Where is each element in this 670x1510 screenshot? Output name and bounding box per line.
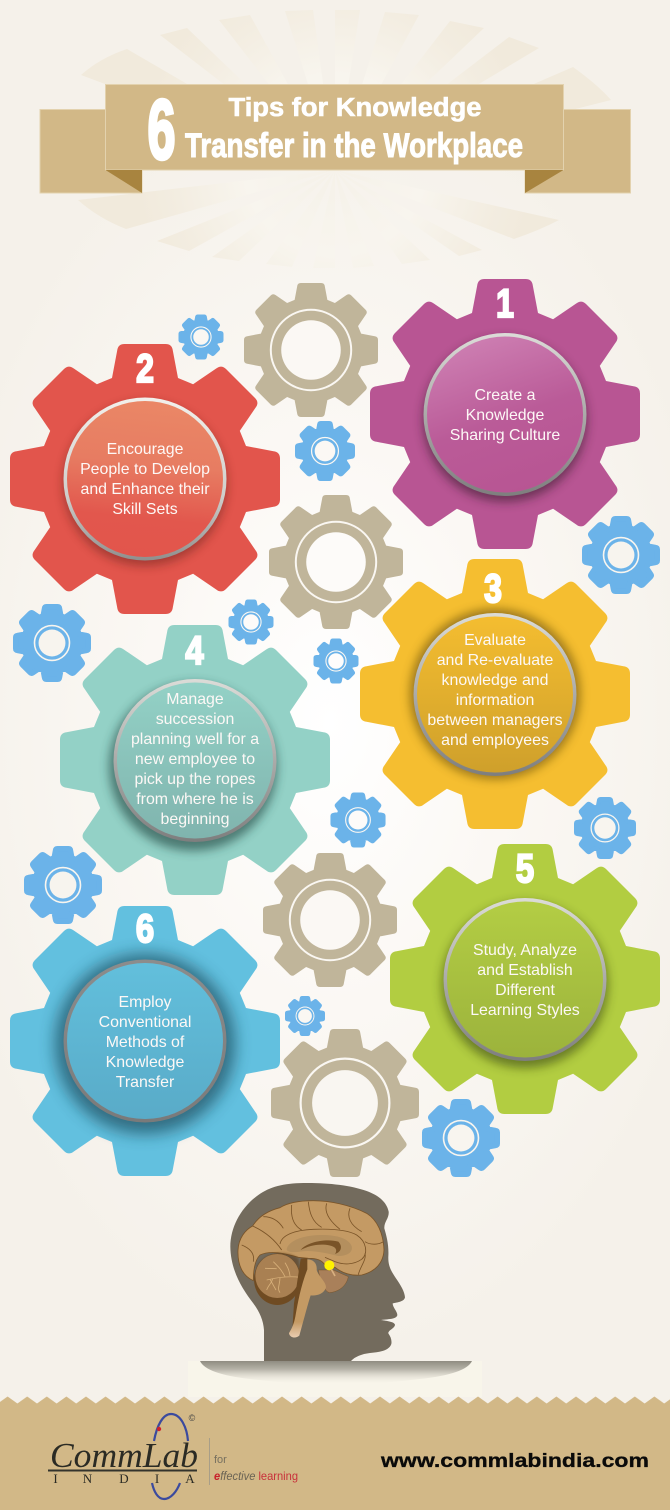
brain stem xyxy=(289,1259,326,1337)
tip 4 text: beginning xyxy=(161,811,229,828)
gear 3: evaluate and re-evaluate xyxy=(360,559,630,829)
tip 6 text: Knowledge xyxy=(106,1054,184,1071)
small blue gear d xyxy=(16,607,88,679)
sulci lines xyxy=(242,1202,383,1275)
tip 3 text: between managers xyxy=(427,712,563,729)
gear 5: study, analyze xyxy=(390,844,660,1114)
floor shadow under head xyxy=(188,1361,482,1397)
copyright mark: © xyxy=(189,1413,196,1423)
tip 2 text: People to Develop xyxy=(80,461,210,478)
tip 6 text: Conventional xyxy=(99,1014,191,1031)
head with brain illustration xyxy=(230,1183,405,1361)
tan gear top xyxy=(244,283,378,417)
brain stem dark strip xyxy=(292,1258,308,1335)
gear 2: encourage people xyxy=(10,344,280,614)
tip 5 text: Learning Styles xyxy=(470,1002,580,1019)
number 6: 6 xyxy=(136,906,154,951)
tip 5 text: Different xyxy=(495,982,555,999)
tip 3 text: and employees xyxy=(441,732,549,749)
banner front band xyxy=(106,84,564,170)
tip 4 text: new employee to xyxy=(135,751,255,768)
title banner xyxy=(40,82,630,193)
small blue gear g xyxy=(332,794,384,846)
logo divider xyxy=(209,1438,210,1485)
left fold xyxy=(106,170,142,193)
number 4: 4 xyxy=(185,628,204,673)
small blue gear k xyxy=(425,1102,497,1174)
tip 3 text: information xyxy=(456,692,534,709)
logo red dot xyxy=(157,1427,161,1431)
number 2: 2 xyxy=(136,346,154,391)
logo India letters: D xyxy=(119,1471,129,1486)
logo wordmark: CommLab xyxy=(50,1436,198,1475)
big numeral 6: 6 xyxy=(147,82,176,177)
tan gear fourth xyxy=(271,1029,419,1177)
banner back band left xyxy=(40,110,142,193)
small blue gear i xyxy=(27,849,99,921)
gear 1: create a knowledge sharing culture xyxy=(370,279,640,549)
tan gear third xyxy=(263,853,397,987)
title line 2: Transfer in the Workplace xyxy=(185,127,523,165)
lower lobe xyxy=(318,1270,348,1293)
head silhouette xyxy=(230,1183,405,1361)
tip 3 text: and Re-evaluate xyxy=(437,652,553,669)
tip 3 text: knowledge and xyxy=(442,672,548,689)
tip 3 text: Evaluate xyxy=(464,632,526,649)
logo India letters: I xyxy=(53,1471,58,1486)
small blue gear j xyxy=(286,997,324,1035)
small blue gear f xyxy=(315,640,357,682)
tip 1 text: Sharing Culture xyxy=(450,427,560,444)
small blue gear a xyxy=(180,316,222,358)
tip 1 text: Create a xyxy=(475,387,536,404)
gear 6: employ conventional methods xyxy=(10,906,280,1176)
footer band xyxy=(0,1396,670,1510)
yellow highlight xyxy=(324,1260,334,1270)
number 3: 3 xyxy=(484,566,502,611)
tan gear second xyxy=(269,495,403,629)
small blue gear c xyxy=(585,519,657,591)
tip 5 text: Study, Analyze xyxy=(473,942,577,959)
tagline effective learning: effective learning xyxy=(214,1469,298,1483)
logo India letters: N xyxy=(83,1471,93,1486)
inner limbic outline xyxy=(280,1229,366,1264)
tip 6 text: Transfer xyxy=(116,1074,175,1091)
tip 2 text: Encourage xyxy=(107,441,184,458)
logo India letters: A xyxy=(185,1471,195,1486)
small blue gear b xyxy=(297,423,353,479)
logo underline xyxy=(48,1470,197,1472)
tip 5 text: and Establish xyxy=(477,962,573,979)
logo arcs xyxy=(152,1414,188,1499)
shade behind cerebellum xyxy=(257,1253,300,1280)
corpus callosum shade xyxy=(301,1240,341,1254)
tip 6 text: Employ xyxy=(118,994,172,1011)
tagline for: for xyxy=(214,1454,227,1466)
tip 1 text: Knowledge xyxy=(466,407,544,424)
number 1: 1 xyxy=(496,281,514,326)
cerebellum branching xyxy=(265,1262,300,1293)
tip 2 text: and Enhance their xyxy=(80,481,210,498)
number 5: 5 xyxy=(516,846,534,891)
tip 4 text: planning well for a xyxy=(131,731,259,748)
cerebellum xyxy=(254,1254,301,1305)
title line 1: Tips for Knowledge xyxy=(228,94,482,122)
tip 4 text: succession xyxy=(156,711,234,728)
small blue gear e xyxy=(230,601,272,643)
website url: www.commlabindia.com xyxy=(380,1450,649,1472)
sunburst rays behind the title xyxy=(78,10,611,268)
small blue gear h xyxy=(576,799,634,857)
tip 4 text: from where he is xyxy=(136,791,254,808)
gear 4: manage succession planning xyxy=(60,625,330,895)
tip 4 text: Manage xyxy=(166,691,224,708)
banner back band right xyxy=(525,110,630,193)
tip 4 text: pick up the ropes xyxy=(134,771,256,788)
CommLab India logo xyxy=(48,1413,298,1499)
tip 6 text: Methods of xyxy=(106,1034,185,1051)
logo India letters: I xyxy=(155,1471,159,1486)
cingulate band xyxy=(287,1235,352,1256)
cerebrum xyxy=(238,1201,384,1281)
right fold xyxy=(525,170,564,193)
tip 2 text: Skill Sets xyxy=(112,501,178,518)
